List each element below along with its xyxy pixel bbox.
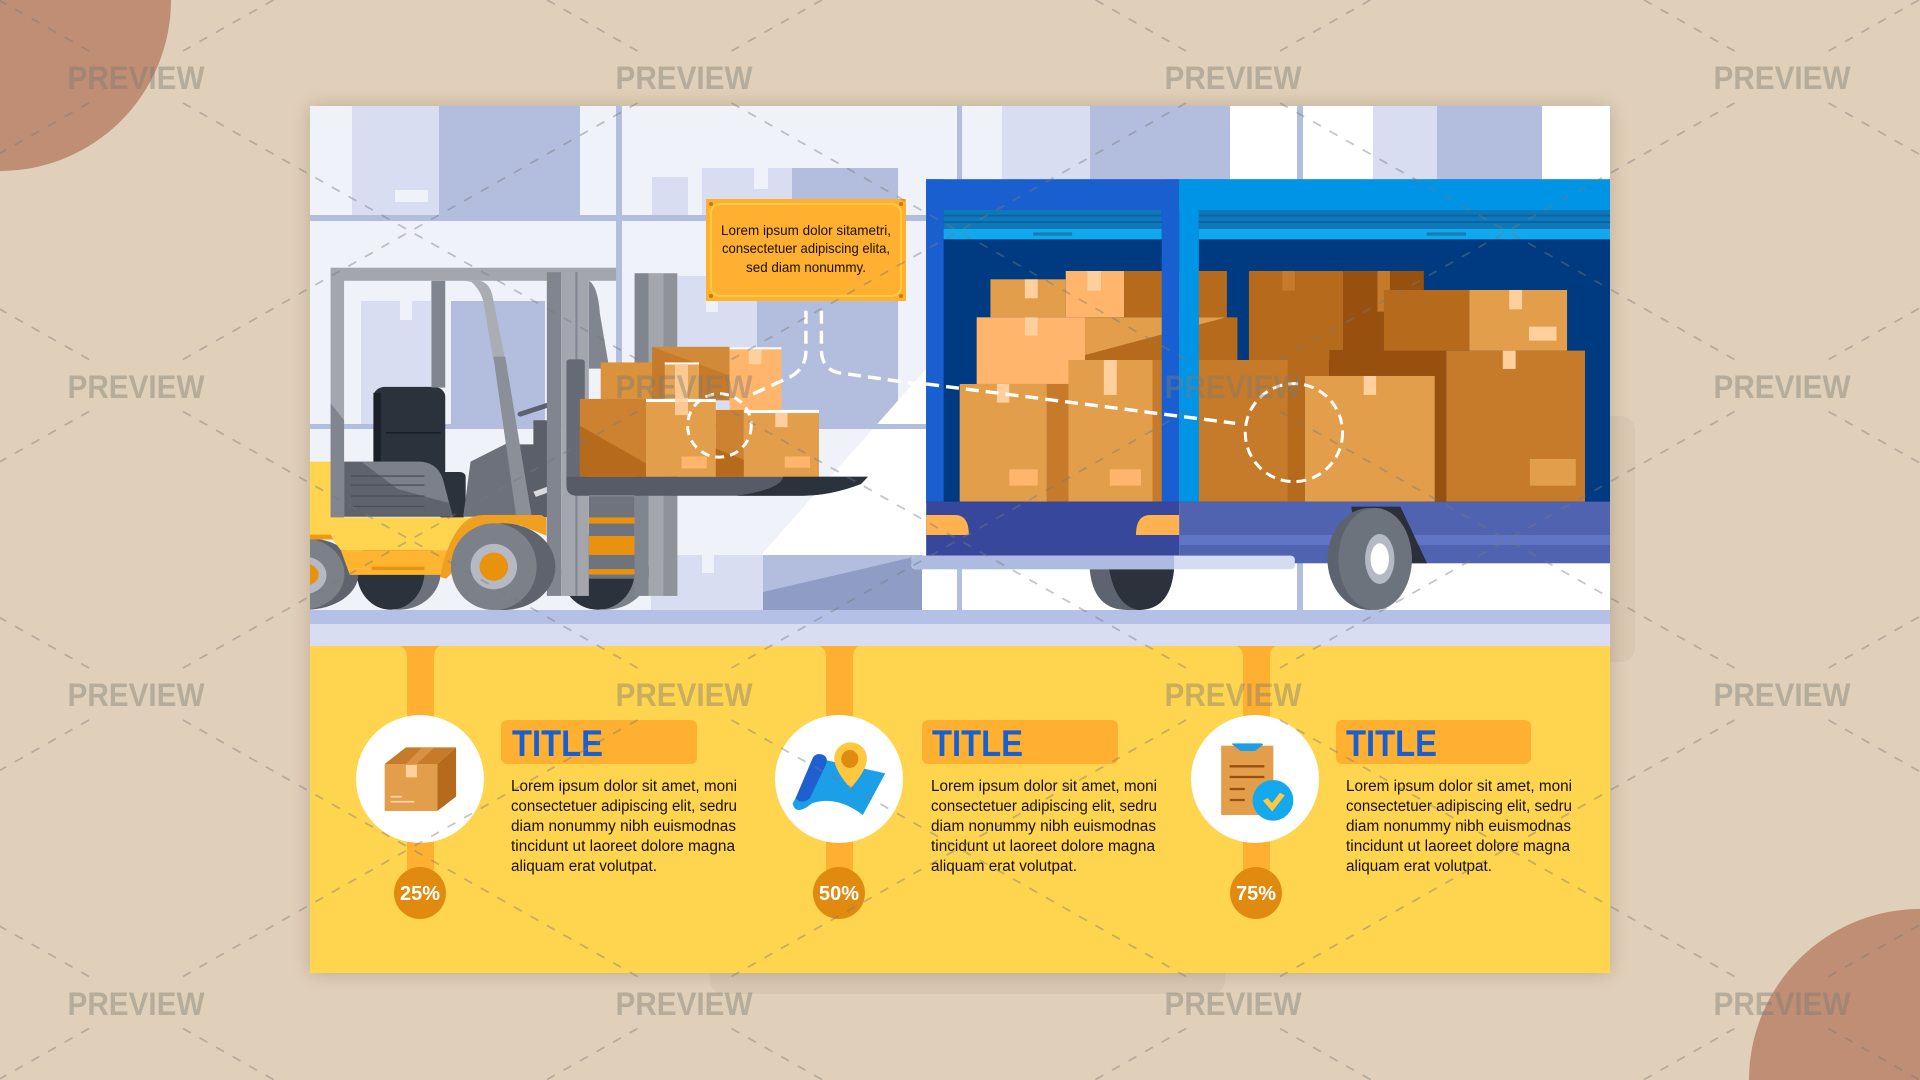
watermark text: PREVIEW [616, 677, 753, 713]
timeline stem 2 [819, 646, 859, 870]
rear yellow body [310, 462, 331, 518]
corner circle bottom right [1749, 909, 1920, 1080]
dashed circle truck [1245, 384, 1343, 482]
roller shutters [944, 210, 1611, 239]
panel shadow [310, 106, 1610, 974]
body text 3: tincidunt ut laoreet dolore magna [1346, 838, 1570, 855]
watermark text: PREVIEW [1714, 60, 1851, 96]
percent badge 75 [1230, 867, 1282, 919]
yellow info band [310, 646, 1610, 973]
corner circle top left [0, 0, 171, 171]
title bar 3 [1336, 720, 1531, 764]
body text 3: aliquam erat volutpat. [1346, 858, 1492, 875]
body text 1: consectetuer adipiscing elit, sedru [511, 798, 737, 815]
truck cargo interior [926, 179, 1615, 503]
percent 75: 75% [1236, 883, 1276, 905]
info item 1 [356, 646, 737, 919]
watermark text: PREVIEW [616, 60, 753, 96]
steering column [463, 405, 549, 517]
fork carriage [566, 359, 585, 480]
title bar 2 [922, 720, 1118, 764]
title bar 1 [501, 720, 697, 764]
icon: clipboard with check [1221, 743, 1293, 821]
watermark text: PREVIEW [616, 369, 753, 405]
connector lines forklift [747, 311, 926, 397]
body text 3: consectetuer adipiscing elit, sedru [1346, 798, 1572, 815]
percent 25: 25% [400, 883, 440, 905]
body text 1: Lorem ipsum dolor sit amet, moni [511, 778, 737, 795]
percent 50: 50% [819, 883, 859, 905]
connector line truck [926, 384, 1235, 423]
callout: Lorem ipsum dolor sitametri, [721, 222, 891, 238]
watermark text: PREVIEW [1714, 369, 1851, 405]
icon: map with pin [793, 742, 885, 815]
body text 1: aliquam erat volutpat. [511, 858, 657, 875]
body text 1: tincidunt ut laoreet dolore magna [511, 838, 735, 855]
forklift rear wheel [310, 540, 358, 610]
body text 2 [931, 778, 1157, 875]
body text 2: consectetuer adipiscing elit, sedru [931, 798, 1157, 815]
body text 2: tincidunt ut laoreet dolore magna [931, 838, 1155, 855]
ghost shapes behind panel [710, 416, 1635, 994]
title 1: TITLE [512, 723, 603, 764]
engine hood [344, 462, 453, 517]
body text 2: diam nonummy nibh euismodnas [931, 818, 1156, 835]
body text 1: diam nonummy nibh euismodnas [511, 818, 736, 835]
icon circle 2 [775, 715, 903, 843]
timeline stem 1 [400, 646, 440, 870]
info item 2 [775, 646, 1157, 919]
wall [310, 106, 1180, 610]
mast stripes [589, 496, 635, 579]
body text 2: Lorem ipsum dolor sit amet, moni [931, 778, 1157, 795]
title 3: TITLE [1346, 723, 1437, 764]
watermark text: PREVIEW [68, 677, 205, 713]
percent badge 50 [813, 867, 865, 919]
body text 3: Lorem ipsum dolor sit amet, moni [1346, 778, 1572, 795]
watermark text: PREVIEW [68, 60, 205, 96]
watermark text: PREVIEW [1164, 986, 1302, 1022]
body text 1 [511, 778, 737, 875]
watermark text: PREVIEW [1714, 677, 1851, 713]
truck step bumper [911, 556, 1295, 569]
truck [911, 179, 1615, 610]
yellow forklift body [309, 517, 475, 575]
body text 3: diam nonummy nibh euismodnas [1346, 818, 1571, 835]
fork [566, 477, 868, 496]
callout: sed diam nonummy. [746, 259, 866, 275]
watermark text: PREVIEW [616, 986, 753, 1022]
watermark text: PREVIEW [68, 986, 205, 1022]
floor [310, 610, 1610, 648]
icon: box [385, 747, 456, 811]
callout [706, 199, 906, 301]
watermark text: PREVIEW [68, 369, 205, 405]
icon circle 3 [1191, 715, 1319, 843]
truck cargo boxes [960, 271, 1585, 502]
seat [373, 387, 466, 518]
wall background boxes [310, 106, 1610, 612]
title 2: TITLE [932, 723, 1023, 764]
truck roof and door frame [926, 179, 1611, 502]
body text 2: aliquam erat volutpat. [931, 858, 1077, 875]
panel: warehouse scene [254, 106, 1615, 973]
watermark text: PREVIEW [1164, 369, 1302, 405]
forklift rear black wheels [357, 534, 649, 610]
body text 3 [1346, 778, 1572, 875]
forklift [310, 268, 914, 610]
rear truck wheel [1090, 568, 1174, 610]
truck wheel [1327, 508, 1412, 610]
watermark text: PREVIEW [1714, 986, 1851, 1022]
watermark text: PREVIEW [1164, 677, 1302, 713]
info item 3 [1191, 646, 1572, 919]
timeline stem 3 [1236, 646, 1276, 870]
truck chassis [926, 502, 1611, 563]
forklift front wheel [451, 523, 555, 610]
callout: consectetuer adipiscing elita, [722, 240, 890, 256]
roll cage [331, 268, 616, 518]
forklift fender [440, 515, 546, 579]
watermark text: PREVIEW [1164, 60, 1302, 96]
icon circle 1 [356, 715, 484, 843]
boxes on fork [580, 347, 819, 477]
percent badge 25 [394, 867, 446, 919]
forklift mast [547, 272, 677, 596]
dashed circle forklift [688, 394, 751, 457]
